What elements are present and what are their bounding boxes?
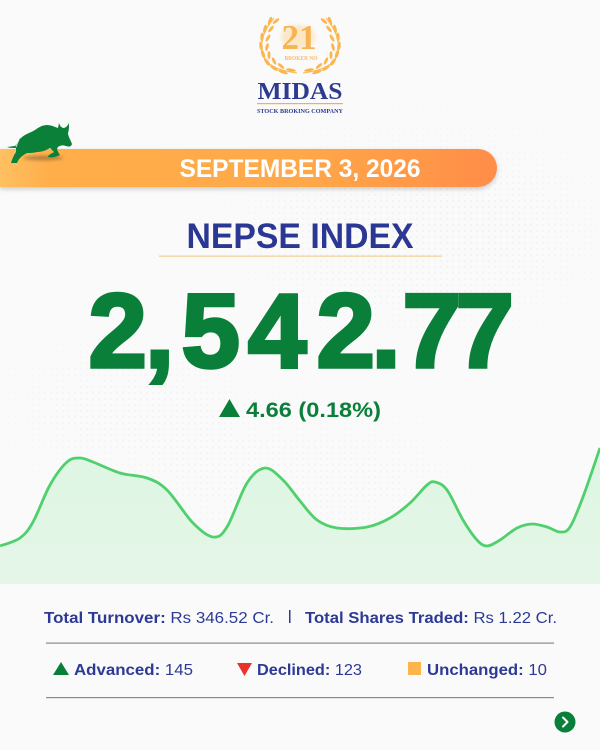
unchanged: Unchanged: 10 <box>427 662 547 679</box>
banner date text: SEPTEMBER 3, 2026 <box>180 155 420 183</box>
icon: red down triangle <box>237 663 252 676</box>
logo rule <box>257 103 343 104</box>
icon: green bull <box>7 123 72 163</box>
emblem number 21: 21 <box>282 18 316 57</box>
heading underline <box>159 256 442 257</box>
icon: green up triangle <box>53 662 69 675</box>
change value: 4.66 (0.18%) <box>246 399 381 422</box>
line chart <box>0 448 600 584</box>
separator <box>289 610 290 623</box>
banner bar <box>0 149 497 187</box>
logo tagline: STOCK BROKING COMPANY <box>257 108 343 115</box>
chart line <box>0 448 600 546</box>
emblem number glow <box>281 25 315 49</box>
heading: NEPSE INDEX: NEPSE INDEX <box>186 216 414 256</box>
icon: up triangle <box>219 399 240 417</box>
declined: Declined: 123 <box>257 662 362 679</box>
icon: laurel wreath <box>259 16 341 75</box>
icon: amber square <box>408 662 421 675</box>
logo wordmark MIDAS: MIDAS <box>258 79 342 105</box>
index value: 2,542.77 <box>88 273 514 390</box>
stats: breadth row <box>53 662 547 679</box>
index change <box>219 399 381 422</box>
left branch <box>259 16 297 75</box>
icon: next arrow button <box>554 712 576 732</box>
stats: totals row <box>44 610 557 627</box>
total turnover: Total Turnover: Rs 346.52 Cr. <box>44 610 274 627</box>
right branch <box>303 16 341 75</box>
logo: Midas laurel emblem <box>257 16 343 115</box>
total shares traded: Total Shares Traded: Rs 1.22 Cr. <box>305 610 557 627</box>
advanced: Advanced: 145 <box>74 662 193 679</box>
date banner <box>0 149 497 187</box>
chart area <box>0 448 600 584</box>
emblem caption: BROKER NO <box>284 56 318 62</box>
